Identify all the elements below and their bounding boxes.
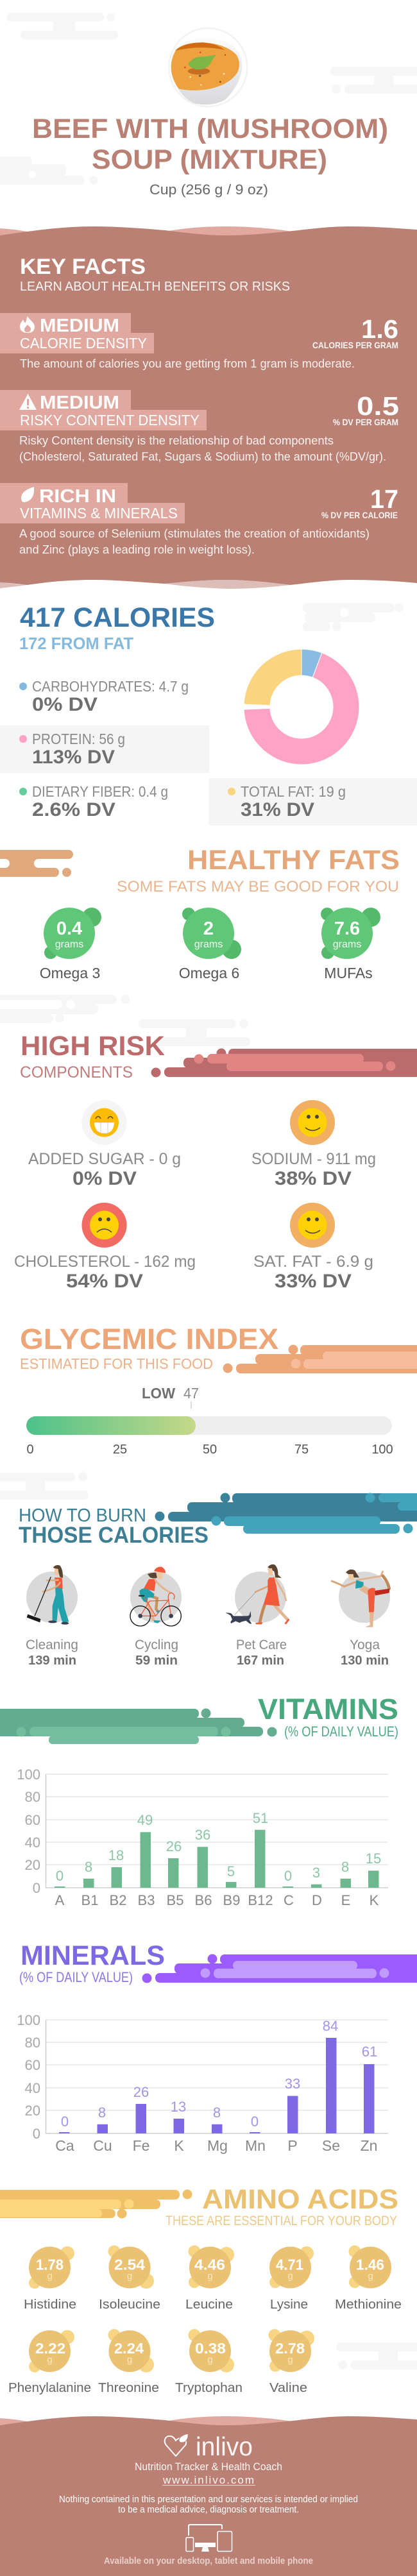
- amino: methionine: [335, 2245, 402, 2312]
- icon: woman walking dog: [225, 1564, 289, 1624]
- bar chart: vitamins: 3: [312, 1865, 320, 1881]
- heading: how to burn: [19, 1505, 208, 1548]
- legend: dietary fiber: [19, 783, 168, 820]
- amino: isoleucine: Isoleucine: [99, 2298, 160, 2312]
- bar chart: minerals: 33: [285, 2076, 300, 2092]
- amino: leucine: [185, 2245, 234, 2312]
- fact: calorie density: CALORIES PER GRAM: [312, 340, 398, 350]
- panel: how to burn calories: [19, 1493, 417, 1668]
- amino: methionine: 1.46: [356, 2257, 384, 2273]
- icon: woman in yoga pose: [332, 1570, 390, 1627]
- bar chart: minerals: Mn: [245, 2137, 266, 2154]
- decorative cloud: healthy fats: [0, 850, 73, 877]
- donut chart: [244, 649, 359, 765]
- heading: how to burn: HOW TO BURN: [19, 1505, 146, 1526]
- gauge: glycemic value: 0: [26, 1443, 34, 1457]
- panel: healthy fats: [0, 845, 400, 981]
- activity: cleaning: Cleaning: [26, 1638, 78, 1652]
- stat: omega 3: 0.4: [56, 919, 82, 939]
- decorative cloud: vitamins: [0, 1709, 277, 1744]
- heading: calories: [19, 602, 215, 653]
- legend: total fat: [228, 783, 346, 820]
- stat: omega 3: [40, 908, 101, 981]
- bar chart: vitamins: 8: [341, 1859, 349, 1875]
- item: saturated fat: 33% DV: [275, 1271, 352, 1292]
- amino: isoleucine: 2.54: [114, 2257, 145, 2273]
- fact: calorie density: [0, 313, 398, 370]
- logo: inlivo: inlivo: [196, 2432, 253, 2461]
- bar chart: vitamins: 0: [56, 1868, 64, 1884]
- bar chart: vitamins: 20: [25, 1857, 40, 1873]
- gauge: glycemic value: 75: [294, 1443, 309, 1457]
- heading: calories: 172 FROM FAT: [19, 634, 133, 653]
- heading: minerals: MINERALS: [21, 1940, 165, 1971]
- disclaimer: Nothing contained in this presentation and our services is intended or implied: [59, 2494, 358, 2505]
- amino: valine: g: [287, 2354, 293, 2366]
- item: cholesterol: CHOLESTEROL - 162 mg: [14, 1253, 196, 1271]
- amino: isoleucine: [99, 2245, 160, 2312]
- amino: threonine: Threonine: [98, 2381, 159, 2395]
- fact: rich in vitamins and minerals: and Zinc (plays a leading role in weight loss).: [19, 543, 255, 556]
- legend: carbohydrates: [19, 678, 189, 715]
- heading: glycemic index: GLYCEMIC INDEX: [20, 1323, 278, 1355]
- fact: risky content density: RISKY CONTENT DENSITY: [20, 412, 200, 428]
- item: added sugar: ADDED SUGAR - 0 g: [28, 1150, 181, 1168]
- icon: woman on bicycle: [130, 1567, 182, 1626]
- amino: threonine: [98, 2329, 159, 2395]
- bar chart: minerals: 84: [323, 2018, 338, 2034]
- item: added sugar: [28, 1100, 181, 1189]
- legend: total fat: 31% DV: [241, 799, 314, 820]
- fact: calorie density: The amount of calories you are getting from 1 gram is moderate.: [20, 357, 355, 370]
- bar chart: minerals: 0: [251, 2114, 259, 2130]
- serving size: Cup (256 g / 9 oz): [149, 182, 268, 198]
- title: BEEF WITH (MUSHROOM): [32, 114, 388, 144]
- heading: key facts: [20, 255, 290, 294]
- bar chart: minerals: 0: [33, 2126, 40, 2142]
- footer: [0, 2416, 417, 2576]
- item: sodium: 38% DV: [275, 1168, 352, 1189]
- gauge: glycemic value: 50: [203, 1443, 217, 1457]
- fact: calorie density: MEDIUM: [40, 316, 119, 336]
- bar chart: vitamins: 0: [284, 1868, 292, 1884]
- bar chart: vitamins: B3: [138, 1892, 155, 1908]
- amino: threonine: g: [127, 2354, 132, 2366]
- bar chart: minerals: Zn: [361, 2137, 377, 2154]
- activity: yoga: [332, 1570, 390, 1668]
- heading: high risk: COMPONENTS: [20, 1063, 133, 1081]
- legend: total fat: TOTAL FAT: 19 g: [241, 783, 346, 800]
- heading: key facts: KEY FACTS: [20, 255, 146, 279]
- gauge: glycemic value: [26, 1385, 393, 1457]
- item: saturated fat: SAT. FAT - 6.9 g: [253, 1253, 373, 1271]
- amino: lysine: 4.71: [276, 2257, 303, 2273]
- heading: glycemic index: [20, 1323, 278, 1372]
- bar chart: minerals: K: [174, 2137, 184, 2154]
- icon: leaf: [21, 487, 34, 502]
- bar chart: vitamins: 60: [25, 1812, 40, 1828]
- icon: flame: [20, 316, 35, 333]
- panel: amino acids: [0, 2184, 402, 2395]
- panel: key facts: [0, 226, 417, 589]
- bar chart: vitamins: 18: [108, 1847, 124, 1863]
- bar chart: vitamins: 36: [195, 1827, 210, 1843]
- item: cholesterol: 54% DV: [66, 1271, 143, 1292]
- heading: amino acids: AMINO ACIDS: [202, 2184, 398, 2215]
- amino: lysine: [269, 2246, 314, 2312]
- bar chart: minerals: Mg: [207, 2137, 228, 2154]
- legend: dietary fiber: DIETARY FIBER: 0.4 g: [32, 783, 168, 800]
- bar chart: vitamins: K: [370, 1892, 379, 1908]
- amino: lysine: g: [287, 2271, 293, 2282]
- icon: bowl of soup: [169, 28, 247, 106]
- heading: healthy fats: HEALTHY FATS: [187, 845, 400, 876]
- bar chart: minerals: [17, 2012, 388, 2154]
- bar chart: minerals: 100: [17, 2012, 40, 2028]
- bar chart: vitamins: B9: [223, 1892, 240, 1908]
- bar chart: minerals: 26: [133, 2084, 149, 2100]
- fact: risky content density: [0, 390, 399, 463]
- bar chart: vitamins: B12: [248, 1892, 273, 1908]
- bar chart: vitamins: D: [312, 1892, 322, 1908]
- panel: high risk components: [14, 1031, 417, 1292]
- heading: healthy fats: [117, 845, 400, 895]
- heading: minerals: [19, 1940, 165, 1985]
- amino: valine: [268, 2329, 314, 2395]
- logo: inlivo: [165, 2432, 253, 2461]
- amino: leucine: g: [207, 2271, 213, 2282]
- amino: phenylalanine: 2.22: [35, 2340, 65, 2357]
- item: cholesterol: [14, 1203, 196, 1292]
- bar chart: minerals: 60: [25, 2057, 40, 2073]
- item: saturated fat: [253, 1203, 373, 1292]
- heading: vitamins: VITAMINS: [258, 1693, 398, 1725]
- amino: tryptophan: g: [207, 2354, 213, 2366]
- fact: risky content density: (Cholesterol, Saturated Fat, Sugars & Sodium) to the amount (%DV/gr).: [19, 450, 386, 463]
- activity: cycling: Cycling: [135, 1638, 178, 1652]
- stat: omega 6: Omega 6: [179, 965, 239, 981]
- icon: warning triangle: [19, 394, 37, 410]
- amino: valine: Valine: [269, 2381, 307, 2395]
- legend: protein: PROTEIN: 56 g: [32, 731, 125, 747]
- bar chart: vitamins: 26: [166, 1838, 182, 1854]
- amino: leucine: Leucine: [185, 2298, 233, 2312]
- stat: MUFAs: [321, 908, 380, 981]
- amino: histidine: 1.78: [36, 2257, 64, 2273]
- bar chart: vitamins: 8: [85, 1859, 92, 1875]
- fact: calorie density: CALORIE DENSITY: [20, 335, 147, 352]
- bar chart: minerals: Ca: [55, 2137, 74, 2154]
- bar chart: vitamins: 49: [137, 1812, 153, 1828]
- icon: woman sweeping: [26, 1565, 78, 1625]
- gauge: glycemic value: 100: [371, 1443, 393, 1457]
- bar chart: vitamins: B2: [110, 1892, 126, 1908]
- stat: MUFAs: grams: [333, 939, 361, 950]
- title: [32, 114, 388, 175]
- bar chart: vitamins: 80: [25, 1789, 40, 1805]
- bar chart: minerals: 20: [25, 2103, 40, 2119]
- fact: calorie density: 1.6: [361, 314, 398, 344]
- bar chart: minerals: Se: [322, 2137, 340, 2154]
- amino: histidine: g: [47, 2271, 53, 2282]
- gauge: glycemic value: 47: [183, 1385, 199, 1402]
- heading: healthy fats: SOME FATS MAY BE GOOD FOR YOU: [117, 878, 399, 895]
- legend: carbohydrates: CARBOHYDRATES: 4.7 g: [32, 678, 189, 695]
- fact: rich in vitamins and minerals: RICH IN: [39, 486, 116, 507]
- activity: cleaning: [26, 1565, 78, 1668]
- availability note: Available on your desktop, tablet and mobile phone: [104, 2555, 313, 2566]
- fact: rich in vitamins and minerals: VITAMINS & MINERALS: [20, 505, 178, 521]
- item: sodium: [251, 1100, 376, 1189]
- stat: MUFAs: 7.6: [334, 919, 360, 939]
- bar chart: minerals: 0: [61, 2114, 69, 2130]
- disclaimer: to be a medical advice, diagnosis or treatment.: [118, 2504, 299, 2515]
- disclaimer: [59, 2494, 358, 2515]
- activity: pet care: Pet Care: [236, 1638, 287, 1652]
- heading: amino acids: [166, 2184, 398, 2228]
- gauge: glycemic value: LOW: [142, 1385, 175, 1402]
- bar chart: minerals: 61: [362, 2044, 377, 2060]
- heading: high risk: HIGH RISK: [21, 1031, 165, 1062]
- item: added sugar: 0% DV: [72, 1168, 137, 1189]
- gauge: glycemic value: 25: [113, 1443, 127, 1457]
- activity: cycling: 59 min: [135, 1654, 178, 1668]
- heading: minerals: (% OF DAILY VALUE): [19, 1969, 133, 1985]
- decorative cloud: amino acids: [0, 2190, 192, 2218]
- fact: rich in vitamins and minerals: 17: [370, 484, 398, 514]
- tagline and website: [135, 2461, 282, 2486]
- bar chart: minerals: P: [287, 2137, 298, 2154]
- fact: risky content density: Risky Content density is the relationship of bad components: [19, 434, 334, 447]
- amino: methionine: Methionine: [335, 2298, 402, 2312]
- heading: calories: 417 CALORIES: [20, 602, 215, 633]
- amino: tryptophan: Tryptophan: [175, 2381, 243, 2395]
- bar chart: vitamins: B1: [81, 1892, 98, 1908]
- amino: threonine: 2.24: [114, 2340, 144, 2357]
- fact: risky content density: % DV PER GRAM: [333, 417, 398, 427]
- bar chart: minerals: 8: [98, 2105, 106, 2121]
- heading: how to burn: THOSE CALORIES: [19, 1523, 208, 1548]
- amino: tryptophan: [175, 2329, 243, 2395]
- header: food image and title: [32, 28, 388, 198]
- activity: cleaning: 139 min: [28, 1654, 76, 1668]
- bar chart: minerals: Fe: [133, 2137, 149, 2154]
- stat: omega 3: Omega 3: [40, 965, 100, 981]
- bar chart: vitamins: 5: [227, 1863, 235, 1879]
- bar chart: vitamins: C: [284, 1892, 294, 1908]
- amino: lysine: Lysine: [270, 2298, 308, 2312]
- tagline and website: www.inlivo.com: [162, 2474, 254, 2486]
- fact: rich in vitamins and minerals: [0, 483, 398, 556]
- decorative cloud: burn calories: [155, 1493, 417, 1534]
- heading: glycemic index: ESTIMATED FOR THIS FOOD: [20, 1355, 213, 1372]
- panel: vitamins: [0, 1693, 398, 1908]
- legend: protein: [19, 731, 125, 768]
- panel: calories: [0, 602, 417, 826]
- decorative cloud: minerals: [142, 1954, 417, 1983]
- stat: MUFAs: MUFAs: [324, 965, 373, 981]
- bar chart: vitamins: 51: [253, 1810, 268, 1826]
- amino: phenylalanine: Phenylalanine: [8, 2381, 91, 2395]
- fact: risky content density: MEDIUM: [40, 393, 119, 413]
- bar chart: vitamins: B5: [167, 1892, 183, 1908]
- activity: pet care: [225, 1564, 289, 1668]
- heading: high risk: [20, 1031, 165, 1081]
- stat: omega 3: grams: [55, 939, 83, 950]
- heading: vitamins: [258, 1693, 398, 1740]
- bar chart: vitamins: 100: [17, 1767, 40, 1783]
- amino: histidine: Histidine: [24, 2298, 76, 2312]
- heading: key facts: LEARN ABOUT HEALTH BENEFITS OR RISKS: [20, 280, 290, 294]
- tagline and website: Nutrition Tracker & Health Coach: [135, 2461, 282, 2473]
- bar chart: vitamins: 0: [33, 1880, 40, 1896]
- panel: glycemic index: [20, 1323, 417, 1457]
- bar chart: vitamins: B6: [195, 1892, 212, 1908]
- bar chart: vitamins: [17, 1767, 388, 1908]
- fact: rich in vitamins and minerals: A good source of Selenium (stimulates the creation of antioxidants): [19, 527, 370, 540]
- stat: omega 6: grams: [194, 939, 223, 950]
- amino: tryptophan: 0.38: [195, 2340, 226, 2357]
- amino: valine: 2.78: [275, 2340, 305, 2357]
- legend: carbohydrates: 0% DV: [32, 694, 98, 715]
- activity: cycling: [130, 1567, 182, 1668]
- fact: risky content density: 0.5: [357, 391, 399, 421]
- amino: isoleucine: g: [127, 2271, 132, 2282]
- activity: pet care: 167 min: [237, 1654, 284, 1668]
- title: SOUP (MIXTURE): [92, 144, 327, 175]
- bar chart: minerals: 13: [171, 2099, 186, 2115]
- stat: omega 6: [179, 908, 241, 981]
- amino: phenylalanine: g: [47, 2354, 53, 2366]
- activity: yoga: Yoga: [350, 1638, 380, 1652]
- amino: phenylalanine: [8, 2330, 91, 2395]
- bar chart: minerals: 8: [213, 2105, 221, 2121]
- bar chart: vitamins: A: [55, 1892, 65, 1908]
- legend: dietary fiber: 2.6% DV: [32, 799, 115, 820]
- bar chart: vitamins: 15: [366, 1851, 381, 1867]
- decorative cloud: glycemic index: [223, 1344, 417, 1373]
- amino: histidine: [24, 2246, 76, 2312]
- bar chart: vitamins: E: [341, 1892, 350, 1908]
- bar chart: minerals: 40: [25, 2080, 40, 2096]
- activity: yoga: 130 min: [341, 1654, 389, 1668]
- stat: omega 6: 2: [203, 919, 214, 939]
- panel: minerals: [17, 1940, 417, 2154]
- fact: rich in vitamins and minerals: % DV PER CALORIE: [321, 510, 398, 520]
- icon: devices: [186, 2525, 232, 2552]
- decorative cloud: high risk: [151, 1048, 417, 1078]
- amino: leucine: 4.46: [194, 2257, 225, 2273]
- item: sodium: SODIUM - 911 mg: [251, 1150, 376, 1168]
- amino: methionine: g: [368, 2271, 373, 2282]
- legend: protein: 113% DV: [32, 747, 115, 768]
- bar chart: vitamins: 40: [25, 1835, 40, 1851]
- bar chart: minerals: Cu: [93, 2137, 112, 2154]
- bar chart: minerals: 80: [25, 2035, 40, 2051]
